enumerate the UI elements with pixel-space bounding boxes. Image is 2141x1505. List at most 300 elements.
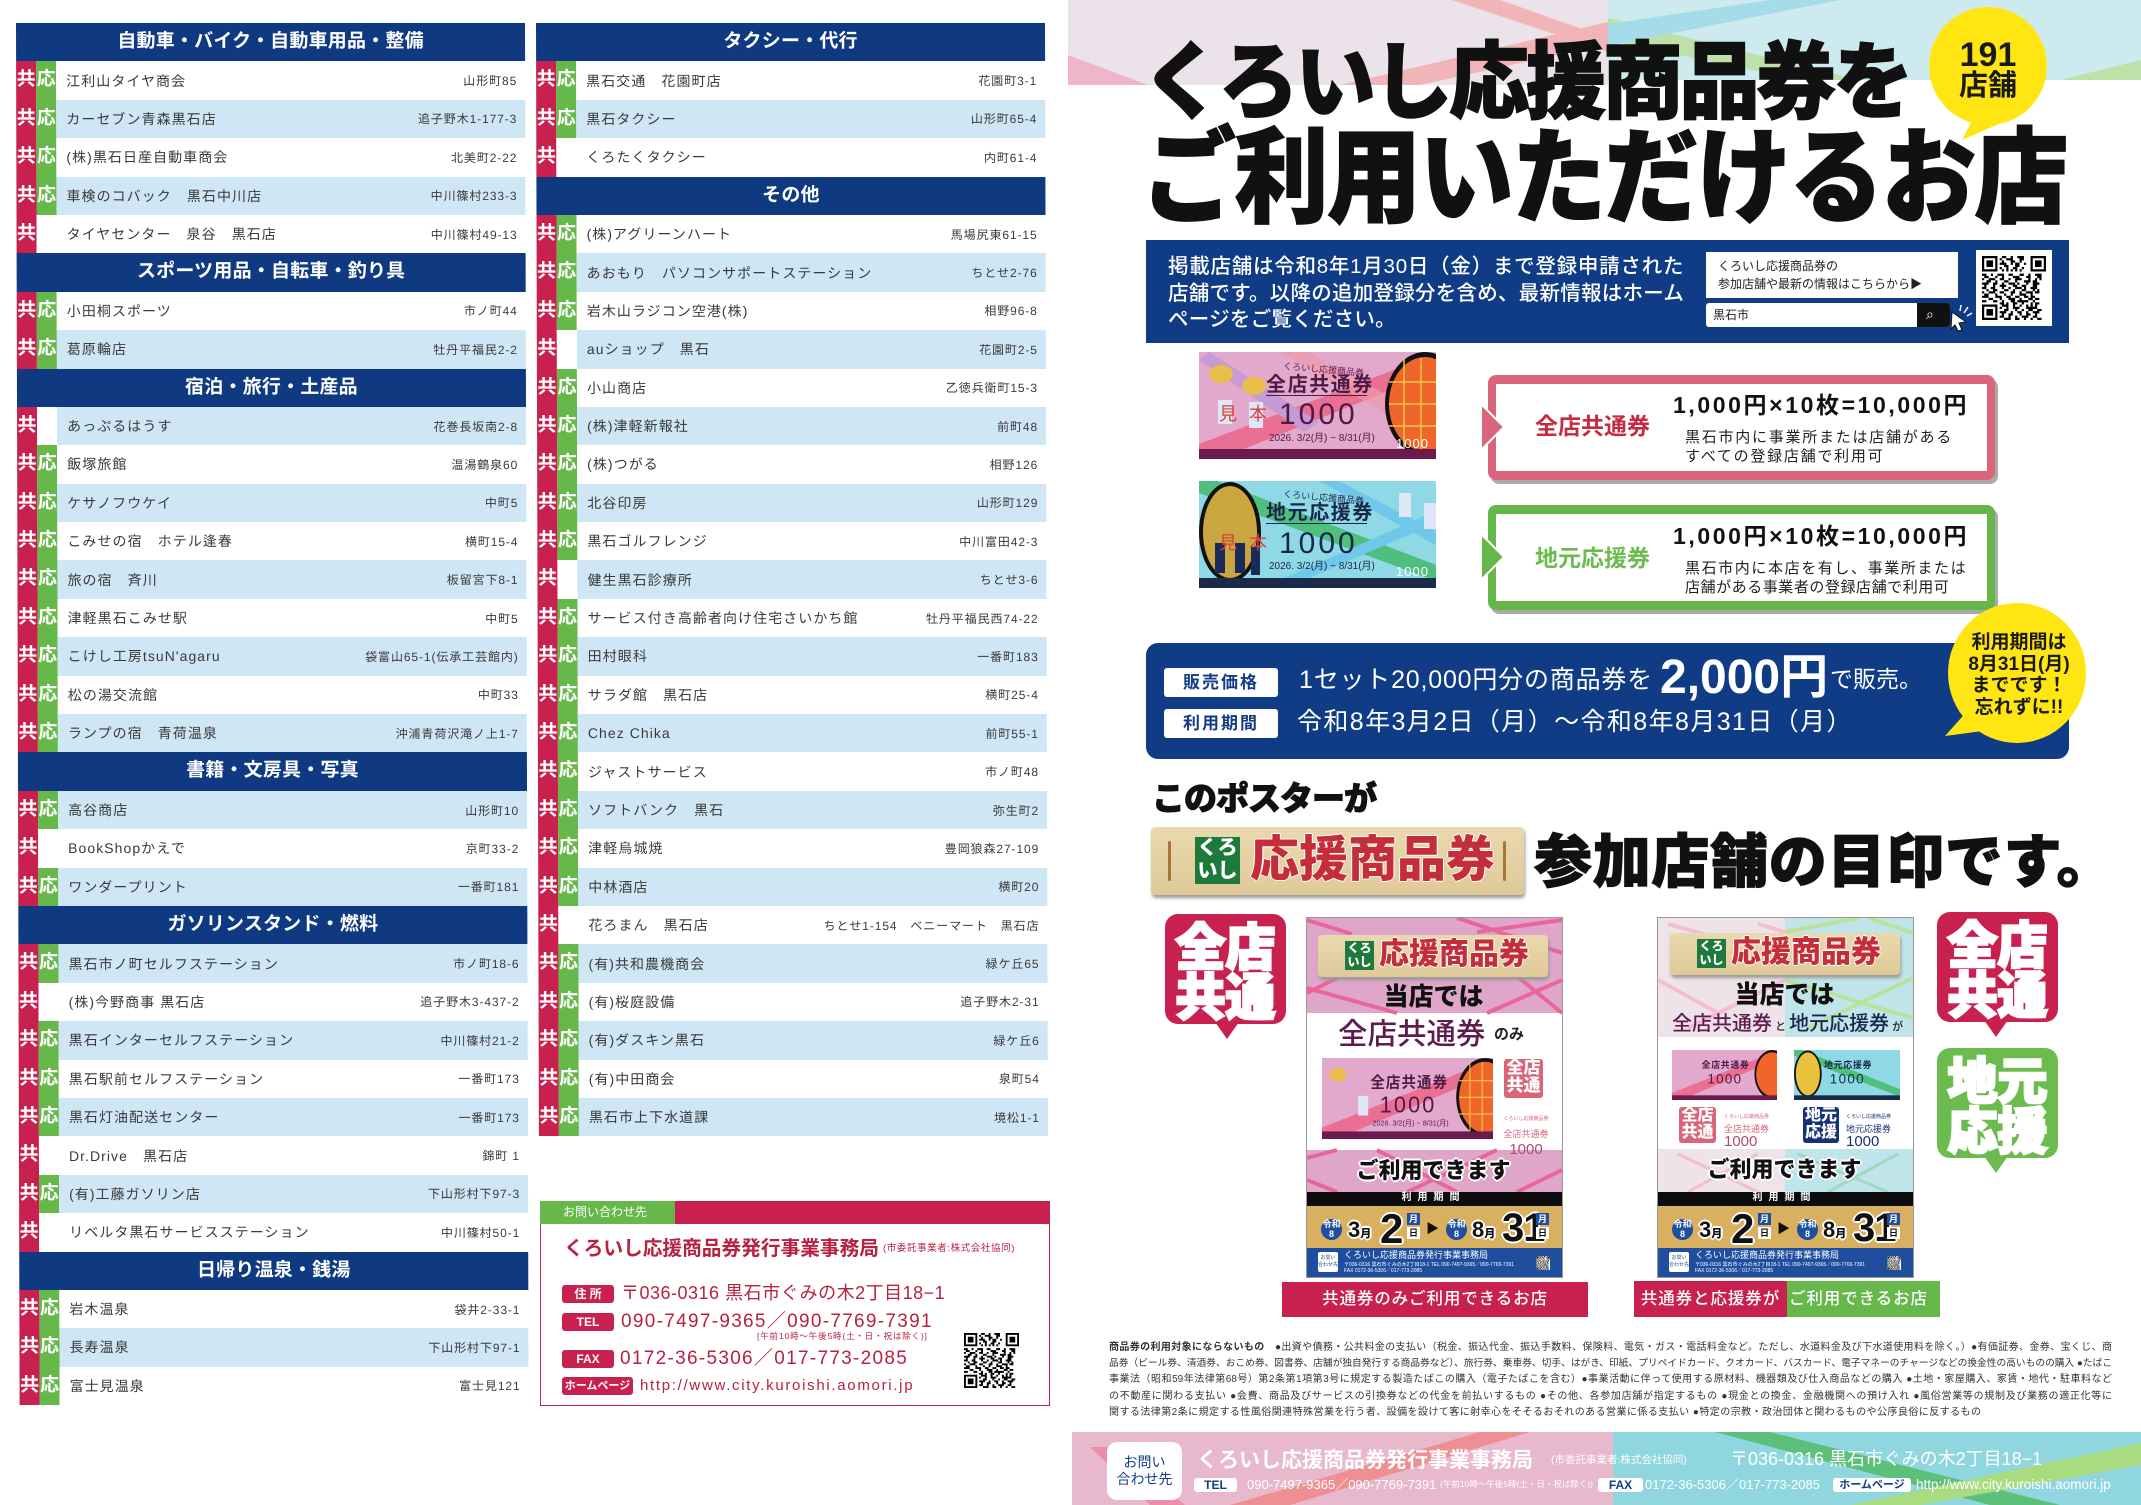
notice text: 掲載店舗は令和8年1月30日（金）まで登録申請された (1168, 255, 1684, 278)
shop row: 応 (40, 1375, 59, 1396)
shop row (18, 829, 519, 868)
shop row: 共 (19, 1106, 38, 1127)
footer fax value: 0172-36-5306／017-773-2085 (1645, 1477, 1820, 1492)
shop row: 前町48 (997, 420, 1038, 434)
shop row: 応 (559, 837, 578, 858)
shop row (537, 330, 1046, 369)
start day unit: 日 (1409, 1228, 1418, 1238)
section: hot springs (19, 1252, 528, 1405)
shop row: 共 (20, 1221, 39, 1242)
sticker: all-store right (1937, 912, 2058, 1022)
poster voucher names: 全店共通券 と 地元応援券 が (1672, 1013, 1903, 1035)
footer details (1344, 1262, 1514, 1274)
shop row: 共 (19, 1029, 38, 1050)
sticker text: 共通 (1948, 968, 2048, 1024)
panel: common voucher description (1488, 375, 1995, 480)
shop row: 北美町2-22 (451, 151, 517, 165)
ticket: local support voucher: くろいし応援商品券 (1283, 488, 1364, 506)
shop row: BookShopかえで (68, 840, 186, 856)
heading: taxi (536, 23, 1045, 61)
text: 事業法（昭和59年法律第68号）第2条第1項第3号に規定する製造たばこの購入（電子たばこを含む）●事業活動に伴って使用する原材料、機器類及び仕入商品などの購入 ●土地・家屋購入、家賃・地代・駐車料など (1109, 1374, 2112, 1385)
bottom band (1072, 1432, 2141, 1505)
ticket: local support voucher: 地元応援券 (1266, 501, 1374, 524)
fax pill (562, 1350, 614, 1368)
footer icon: お問い (1671, 1255, 1686, 1261)
shop row: 下山形村下97-3 (428, 1187, 520, 1201)
tel pill: TEL (577, 1315, 599, 1329)
shop row: 下山形村下97-1 (428, 1341, 520, 1355)
poster ticket local: 1000 (1830, 1071, 1865, 1087)
shop row: (株)今野商事 黒石店 (69, 994, 205, 1010)
shop row: 共 (538, 530, 557, 551)
shop row: 中川篠村233-3 (431, 189, 517, 203)
footer hours: (午前10時〜午後5時(土・日・祝は除く)) (1440, 1479, 1593, 1489)
ticket: local support voucher: 2026. 3/2(月) ~ 8/31(月) (1269, 560, 1375, 572)
ticket: all-store common voucher: 2026. 3/2(月) ~ 8/31(月) (1269, 432, 1375, 444)
section: automotive (16, 23, 526, 253)
shop row (536, 61, 1037, 100)
fax pill: FAX (576, 1352, 600, 1366)
end weekday: 月 (1538, 1214, 1547, 1224)
footer name: くろいし応援商品券発行事業事務局 (1695, 1250, 1839, 1260)
shop row: 旅の宿 斉川 (67, 572, 158, 588)
shop row: 応 (558, 645, 577, 666)
shop row: 共 (537, 223, 556, 244)
shop row: 応 (558, 607, 577, 628)
section: books (18, 752, 528, 906)
end era (1797, 1219, 1818, 1240)
shop row: 長寿温泉 (69, 1339, 130, 1355)
shop row: 追子野木3-437-2 (420, 995, 520, 1009)
arrow: ▶ (1777, 1221, 1790, 1236)
address value: 〒036-0316 黒石市ぐみの木2丁目18−1 (621, 1283, 945, 1303)
poster mini label local: くろいし応援商品券 (1846, 1114, 1891, 1120)
sticker text: 全店 (1176, 920, 1276, 976)
shop row: 黒石インターセルフステーション (69, 1032, 294, 1048)
shop row (18, 714, 527, 752)
shop row (18, 1136, 520, 1175)
sign text: 応援商品券 (1379, 938, 1529, 971)
shop row: 津軽黒石こみせ駅 (68, 610, 188, 626)
voucher amount: 1,000円×10枚=10,000円 (1673, 523, 1969, 549)
shop row: サラダ館 黒石店 (588, 687, 708, 703)
poster mini label: 全店共通券 (1503, 1129, 1548, 1139)
sticker text (1165, 923, 1286, 1023)
tel hours: [午前10時〜午後5時(土・日・祝は除く)] (757, 1331, 928, 1341)
footer icon: 合わせ先 (1318, 1262, 1338, 1268)
shop row: 応 (559, 952, 578, 973)
heading: taxi: タクシー・代行 (723, 31, 858, 52)
shop row (538, 944, 1048, 983)
shop row: 応 (557, 223, 576, 244)
footer tel label (1194, 1478, 1237, 1492)
poster ticket common (1672, 1050, 1777, 1100)
shop row: こみせの宿 ホテル逢春 (67, 533, 233, 549)
voucher description: 店舗がある事業者の登録店舗で利用可 (1685, 579, 1949, 596)
panel: contact box (540, 1201, 1050, 1406)
heading: other: その他 (762, 185, 820, 206)
shop row: 市ノ町44 (464, 304, 518, 318)
logo: くろ (1198, 837, 1238, 859)
shop row: 錦町 1 (482, 1149, 520, 1163)
shop row: 小田桐スポーツ (67, 303, 172, 319)
shop row: 共 (19, 837, 38, 858)
poster line 1: 当店では (1734, 981, 1834, 1009)
shop row (539, 1021, 1048, 1060)
shop row (537, 522, 1046, 560)
heading: other (536, 177, 1046, 215)
logo: いし (1699, 953, 1724, 967)
sign text: 応援商品券 (1250, 833, 1495, 887)
shop row: 応 (557, 69, 576, 90)
ticket: local support voucher (1199, 481, 1436, 588)
shop row: 応 (39, 1068, 58, 1089)
shop row: (株)アグリーンハート (587, 226, 732, 242)
poster ticket common: 1000 (1707, 1071, 1742, 1087)
shop row: 黒石市上下水道課 (589, 1109, 709, 1125)
shop row (538, 637, 1047, 676)
end era: 8 (1805, 1229, 1810, 1239)
shop row (538, 906, 1047, 944)
shop row: 共 (539, 876, 558, 897)
start month: 3月 (1699, 1217, 1722, 1242)
shop row: 共 (19, 1068, 38, 1089)
end day unit (1887, 1227, 1900, 1239)
shop row: 応 (39, 952, 58, 973)
shop row: 応 (37, 69, 56, 90)
shop row: ケサノフウケイ (67, 495, 172, 511)
end day: 31 (1502, 1206, 1544, 1250)
reminder text: 忘れずに!! (1975, 697, 2063, 718)
footer tel label: TEL (1204, 1478, 1227, 1492)
start month: 3月 (1348, 1217, 1371, 1242)
shop row: 津軽烏城焼 (588, 840, 663, 856)
shop row: ランプの宿 青荷温泉 (68, 725, 218, 741)
shop row: 緑ケ丘6 (993, 1034, 1040, 1048)
poster mini label (1501, 1110, 1551, 1159)
poster period bar: 利用期間 (1752, 1192, 1816, 1203)
heading: hot springs: 日帰り温泉・銭湯 (197, 1260, 351, 1280)
shop row: 共 (539, 952, 558, 973)
poster: both vouchers (1658, 918, 1913, 1277)
start weekday (1758, 1213, 1771, 1225)
shop row: 袋富山65-1(伝承工芸館内) (365, 650, 519, 664)
footer icon: 合わせ先 (1669, 1262, 1689, 1268)
shop row: 共 (17, 338, 36, 359)
poster dates (1307, 1206, 1562, 1248)
shop row (18, 637, 527, 676)
voucher description: 黒石市内に本店を有し、事業所または (1685, 560, 1967, 577)
shop row (17, 407, 526, 445)
shop row: 応 (38, 607, 57, 628)
shop row: 応 (37, 146, 56, 167)
search box (1706, 303, 1950, 327)
shop row: 応 (38, 530, 57, 551)
contact subtitle: (市委託事業者:株式会社協同) (883, 1243, 1015, 1254)
qr code (1976, 250, 2052, 326)
footer details: 〒036-0316 黒石市ぐみの木2丁目18-1 TEL 090-7497-9365／090-7769-7391 (1344, 1262, 1514, 1268)
section: taxi (536, 23, 1046, 177)
shop row: 共 (537, 69, 556, 90)
shop row: 共 (539, 837, 558, 858)
logo (1345, 941, 1374, 970)
footer icon (1669, 1252, 1689, 1272)
shop row: 応 (558, 415, 577, 436)
web guide box: 参加店舗や最新の情報はこちらから▶ (1718, 277, 1922, 291)
poster mini tag (1504, 1059, 1543, 1098)
footer qr (1536, 1256, 1550, 1270)
shop row: 共 (18, 530, 37, 551)
shop row: 共 (20, 1298, 39, 1319)
shop row: 応 (38, 568, 57, 589)
shop row: (株)つがる (587, 456, 659, 472)
search button: ⌕ (1926, 306, 1934, 322)
voucher description (1685, 428, 1953, 466)
shop row: 共 (538, 415, 557, 436)
shop row: 牡丹平福民西74-22 (926, 612, 1039, 626)
shop row: 共 (537, 261, 556, 282)
end month: 8月 (1472, 1217, 1495, 1242)
bubble: period reminder (1940, 600, 2090, 746)
shop row: 共 (538, 760, 557, 781)
footer title: くろいし応援商品券発行事業事務局 (1197, 1449, 1533, 1472)
shop row (18, 1060, 520, 1098)
poster mini tag common (1679, 1107, 1716, 1143)
shop row: 花園町3-1 (978, 74, 1037, 88)
period text: 令和8年3月2日（月）〜令和8年8月31日（月） (1297, 708, 1853, 736)
shop row: 共 (537, 108, 556, 129)
poster period bar: 利用期間 (1402, 1192, 1466, 1203)
shop row: 境松1-1 (994, 1111, 1040, 1125)
price highlight: 2,000円 (1660, 651, 1828, 704)
contact title: くろいし応援商品券発行事業事務局 (564, 1238, 879, 1260)
shop row: 共 (18, 453, 37, 474)
ticket: all-store common voucher: 見 (1219, 404, 1237, 424)
shop row: 黒石駅前セルフステーション (69, 1071, 264, 1087)
contact header label: お問い合わせ先 (563, 1205, 647, 1219)
ticket: local support voucher: 本 (1249, 533, 1267, 553)
footer details: FAX 0172-36-5306／017-773-2085 (1695, 1268, 1773, 1274)
bubble count: 191 (1960, 36, 2016, 74)
shop row (537, 484, 1046, 522)
shop row (18, 599, 519, 637)
poster ticket: 1000 (1380, 1092, 1437, 1118)
shop row: 内町61-4 (984, 151, 1037, 165)
homepage pill: ホームページ (565, 1380, 630, 1392)
shop row (538, 676, 1047, 714)
shop row: 応 (38, 722, 57, 743)
heading: this poster: このポスターが (1152, 780, 1376, 817)
panel: shop list column 1 (16, 23, 528, 1405)
shop row: 応 (39, 799, 58, 820)
start day unit (1758, 1227, 1771, 1239)
shop row: リベルタ黒石サービスステーション (69, 1224, 310, 1240)
shop row (19, 1290, 520, 1328)
shop row: (有)ダスキン黒石 (589, 1032, 705, 1048)
shop row: 共 (18, 492, 37, 513)
start era: 8 (1329, 1229, 1334, 1239)
poster ticket local: 地元応援券 (1824, 1059, 1872, 1070)
shop row: 市ノ町48 (985, 765, 1039, 779)
shop row: ちとせ1-154 ベニーマート 黒石店 (824, 919, 1039, 933)
voucher description: すべての登録店舗で利用可 (1685, 448, 1884, 465)
wooden sign (1151, 827, 1524, 895)
shop row (536, 138, 1045, 177)
shop row: 山形町65-4 (971, 112, 1037, 126)
shop row: 応 (39, 1106, 58, 1127)
end month: 8月 (1823, 1217, 1846, 1242)
search box: 黒石市 (1713, 308, 1749, 322)
shop row: 共 (537, 338, 556, 359)
shop row: 市ノ町18-6 (453, 957, 519, 971)
shop row: 応 (40, 1183, 59, 1204)
shop row (17, 522, 518, 560)
shop row: 前町55-1 (985, 727, 1039, 741)
shop row: 応 (37, 108, 56, 129)
shop row: 一番町173 (458, 1111, 520, 1125)
shop row: ジャストサービス (588, 764, 708, 780)
shop row: 応 (558, 760, 577, 781)
shop row: 共 (539, 1068, 558, 1089)
shop row: 応 (557, 108, 576, 129)
shop row: 花園町2-5 (979, 343, 1038, 357)
footer details: 〒036-0316 黒石市ぐみの木2丁目18-1 TEL 090-7497-9365／090-7769-7391 (1695, 1262, 1865, 1268)
shop row (17, 484, 526, 522)
shop row: auショップ 黒石 (587, 341, 710, 357)
notice text: ページをご覧ください。 (1168, 308, 1396, 331)
poster mini label common: 1000 (1724, 1133, 1757, 1150)
shop row: 共 (537, 146, 556, 167)
arrow: ▶ (1426, 1221, 1439, 1236)
shop row: 泉町54 (999, 1072, 1040, 1086)
poster ticket common: 全店共通券 (1702, 1059, 1749, 1070)
start weekday: 月 (1409, 1214, 1418, 1224)
end weekday: 月 (1889, 1214, 1898, 1224)
shop row: 松の湯交流館 (68, 687, 158, 703)
shop row (537, 292, 1046, 330)
shop row: 共 (19, 799, 38, 820)
shop row: 飯塚旅館 (67, 456, 127, 472)
shop row: 共 (539, 1029, 558, 1050)
text: 関する法律第2条に規定する性風俗関連特殊営業を行う者、設備を設けて客に射幸心をそそるおそれのある営業に係る支払い ●特定の宗教・政治団体と関わるものや公序良俗に反するもの (1109, 1407, 1981, 1418)
shop row: 富士見温泉 (70, 1378, 145, 1394)
top band (1068, 0, 2141, 85)
poster mini tag local: 地元 (1805, 1107, 1837, 1124)
shop row (539, 1098, 1048, 1136)
poster ticket: 全店共通券 (1370, 1073, 1448, 1092)
start era: 令和 (1673, 1219, 1692, 1229)
poster sign (1318, 935, 1548, 977)
end era: 8 (1454, 1229, 1459, 1239)
reminder text: 8月31日(月) (1968, 654, 2070, 675)
poster mini label local (1846, 1109, 1891, 1149)
poster mini label common: くろいし応援商品券 (1724, 1114, 1769, 1120)
shop row: 共 (537, 377, 556, 398)
end day unit: 日 (1889, 1228, 1898, 1238)
sticker: local support (1937, 1048, 2058, 1158)
ticket: all-store common voucher: 1000 (1279, 398, 1358, 431)
logo: くろ (1347, 941, 1372, 955)
shop row: 応 (559, 799, 578, 820)
shop row: 山形町10 (465, 804, 519, 818)
start day: 2 (1380, 1205, 1403, 1252)
footer address: 〒036-0316 黒石市ぐみの木2丁目18−1 (1730, 1449, 2042, 1469)
cursor icon (1946, 304, 1974, 334)
footer qr (1887, 1256, 1901, 1270)
title (1142, 38, 2080, 228)
shop row: 中町5 (485, 496, 518, 510)
title line 1: くろいし応援商品券を (1142, 36, 1910, 129)
shop row: 京町33-2 (466, 842, 519, 856)
poster line 2: ご利用できます (1707, 1157, 1862, 1182)
shop row (538, 829, 1047, 868)
logo: くろ (1699, 939, 1724, 953)
poster mini tag: 共通 (1506, 1076, 1540, 1095)
shop row (539, 1060, 1048, 1098)
shop row (18, 791, 528, 829)
shop row (18, 983, 520, 1021)
address pill (562, 1285, 614, 1303)
shop row: 応 (38, 645, 57, 666)
shop row (538, 599, 1047, 637)
shop row: 共 (538, 722, 557, 743)
shop row: 黒石ゴルフレンジ (587, 533, 708, 549)
shop row (538, 868, 1047, 906)
end weekday (1536, 1213, 1549, 1225)
arrow: local voucher (1480, 532, 1506, 582)
poster mini label: くろいし応援商品券 (1503, 1116, 1548, 1122)
shop row: 応 (39, 1029, 58, 1050)
shop row (18, 868, 528, 906)
shop row: 応 (38, 453, 57, 474)
voucher description: 黒石市内に事業所または店舗がある (1685, 429, 1953, 446)
poster footer (1307, 1248, 1562, 1277)
poster line 2: ご利用できます (1356, 1158, 1510, 1183)
shop row: 一番町181 (458, 880, 519, 894)
footer url: http://www.city.kuroishi.aomori.jp (1916, 1477, 2111, 1492)
panel: registration notice (1146, 240, 2069, 343)
caption: common only (1282, 1282, 1588, 1317)
shop row (537, 445, 1046, 484)
shop row: 共 (18, 607, 37, 628)
footer tel value: 090-7497-9365／090-7769-7391 (1247, 1477, 1436, 1492)
caption: both vouchers (1634, 1281, 1940, 1317)
shop row: 共 (538, 645, 557, 666)
poster mini tag common: 全店 (1681, 1107, 1714, 1124)
poster mini tag local (1803, 1107, 1839, 1143)
end era (1446, 1219, 1467, 1240)
footer subtitle: (市委託事業者:株式会社協同) (1551, 1454, 1687, 1466)
sticker text (1937, 921, 2058, 1021)
shop row (17, 560, 526, 599)
caption: common only: 共通券のみご利用できるお店 (1322, 1290, 1548, 1308)
shop row: 共 (17, 223, 36, 244)
shop row (18, 1098, 528, 1136)
sticker: all-store left (1165, 914, 1286, 1024)
shop row (16, 330, 526, 369)
start weekday: 月 (1760, 1214, 1769, 1224)
ticket: all-store common voucher: くろいし応援商品券 (1283, 360, 1364, 378)
heading: lodging (17, 369, 526, 407)
footer homepage label: ホームページ (1839, 1479, 1905, 1491)
shop row: 共 (538, 453, 557, 474)
shop row: 共 (17, 300, 36, 321)
shop row: (株)黒石日産自動車商会 (66, 149, 228, 165)
heading: automotive (16, 23, 525, 61)
start day: 2 (1731, 1205, 1754, 1252)
shop row: 高谷商店 (68, 802, 128, 818)
footer fax label (1598, 1478, 1643, 1492)
